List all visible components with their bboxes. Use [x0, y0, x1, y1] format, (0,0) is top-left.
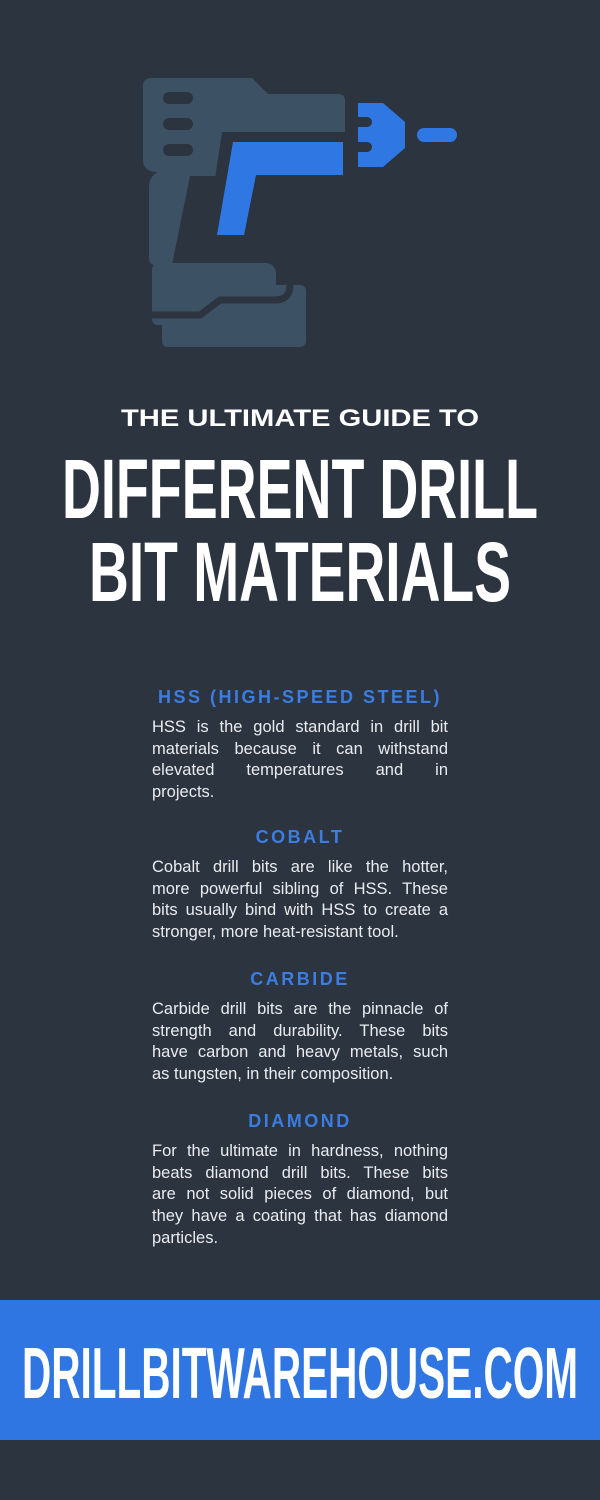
- section: HSS: HSS is the gold standard in drill bit: [152, 718, 448, 736]
- section: cobalt: stronger, more heat-resistant tool.: [152, 923, 399, 941]
- section: diamond: [152, 1111, 448, 1247]
- section: cobalt: bits usually bind with HSS to create a: [152, 901, 448, 919]
- section: cobalt: COBALT: [256, 827, 344, 847]
- section: carbide: [152, 969, 448, 1083]
- section: carbide: as tungsten, in their composition.: [152, 1065, 393, 1083]
- section: HSS: HSS (HIGH-SPEED STEEL): [158, 687, 442, 707]
- section: diamond: beats diamond drill bits. These bits: [152, 1164, 448, 1182]
- section: diamond: they have a coating that has diamond: [152, 1207, 448, 1225]
- section: diamond: particles.: [152, 1229, 218, 1247]
- icon: drill: [143, 78, 457, 347]
- section: cobalt: [152, 827, 448, 941]
- section: carbide: CARBIDE: [250, 969, 350, 989]
- title: THE ULTIMATE GUIDE TO: [121, 405, 479, 432]
- section: diamond: are not solid pieces of diamond, but: [152, 1185, 448, 1203]
- title: [62, 405, 538, 616]
- section: carbide: strength and durability. These bits: [152, 1022, 448, 1040]
- section: HSS: [152, 687, 448, 801]
- section: carbide: have carbon and heavy metals, such: [152, 1043, 448, 1061]
- section: HSS: projects.: [152, 783, 214, 801]
- section: diamond: DIAMOND: [248, 1111, 352, 1131]
- section: cobalt: more powerful sibling of HSS. These: [152, 880, 448, 898]
- section: diamond: For the ultimate in hardness, nothing: [152, 1142, 448, 1160]
- section: carbide: Carbide drill bits are the pinnacle of: [152, 1000, 448, 1018]
- footer banner: [0, 1300, 600, 1440]
- section: cobalt: Cobalt drill bits are like the hotter,: [152, 858, 448, 876]
- section: HSS: elevated temperatures and in: [152, 761, 448, 779]
- section: HSS: materials because it can withstand: [152, 740, 448, 758]
